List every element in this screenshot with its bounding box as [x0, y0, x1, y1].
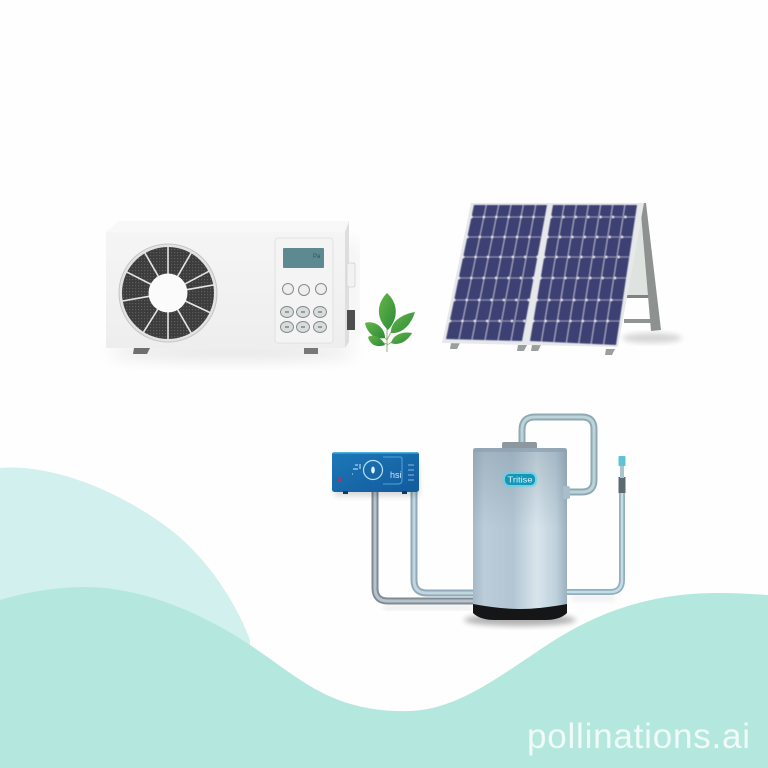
- box body: [332, 452, 419, 492]
- rear support frame: [624, 203, 661, 331]
- side connector: [347, 310, 355, 330]
- unit side face: [345, 221, 349, 348]
- unit right shadow: [347, 240, 357, 340]
- fan grille: [119, 244, 217, 342]
- panel frame: [442, 203, 644, 347]
- tank top shading: [473, 448, 567, 609]
- box side marks: [408, 465, 414, 480]
- indicator light: [338, 478, 342, 482]
- left outer pipe: [375, 492, 475, 601]
- left inner pipe: [414, 492, 475, 593]
- tank rim: [473, 448, 567, 452]
- tank base: [473, 604, 567, 620]
- top loop pipe: [522, 417, 594, 492]
- tank label: [503, 472, 537, 487]
- unit top face: [106, 221, 349, 232]
- gauge dial: [364, 460, 382, 480]
- pipe shadow: [383, 598, 615, 608]
- icon: green leaf sprig: [365, 293, 415, 352]
- box feet: [343, 491, 407, 494]
- tank body: [473, 448, 567, 609]
- lcd screen: Pa: [313, 254, 321, 260]
- air conditioner outdoor unit: [106, 221, 357, 360]
- sensor probe: [618, 456, 626, 493]
- tank top cap: [502, 442, 537, 449]
- panel feet: [450, 343, 615, 355]
- control panel: [275, 238, 333, 343]
- box top edge: [333, 452, 418, 454]
- button glyphs: [285, 312, 322, 327]
- tank label: Tritise: [508, 476, 533, 484]
- unit front face: [106, 232, 345, 348]
- side bracket: [347, 263, 355, 287]
- blue control box: [332, 452, 419, 496]
- solar panel: [442, 203, 682, 355]
- panel ground shadow: [622, 333, 682, 343]
- box small readout: [352, 464, 360, 474]
- control buttons: [280, 284, 326, 332]
- right pipe: [565, 490, 622, 592]
- water tank system: [375, 417, 626, 626]
- system shadow: [464, 614, 576, 626]
- box outline display: [383, 457, 402, 484]
- unit feet: [133, 348, 318, 354]
- side fitting: [563, 486, 570, 499]
- unit shadow: [107, 344, 357, 360]
- watermark: pollinations.ai: [527, 717, 750, 756]
- box shadow: [335, 462, 419, 496]
- box reading: hsi: [390, 470, 402, 480]
- cell junction dots: [450, 217, 635, 321]
- right module: [530, 205, 637, 345]
- cell grid lines: [459, 205, 625, 344]
- background wave: light teal: [0, 468, 250, 768]
- foreground wave: mint: [0, 587, 768, 768]
- left module: [446, 205, 547, 341]
